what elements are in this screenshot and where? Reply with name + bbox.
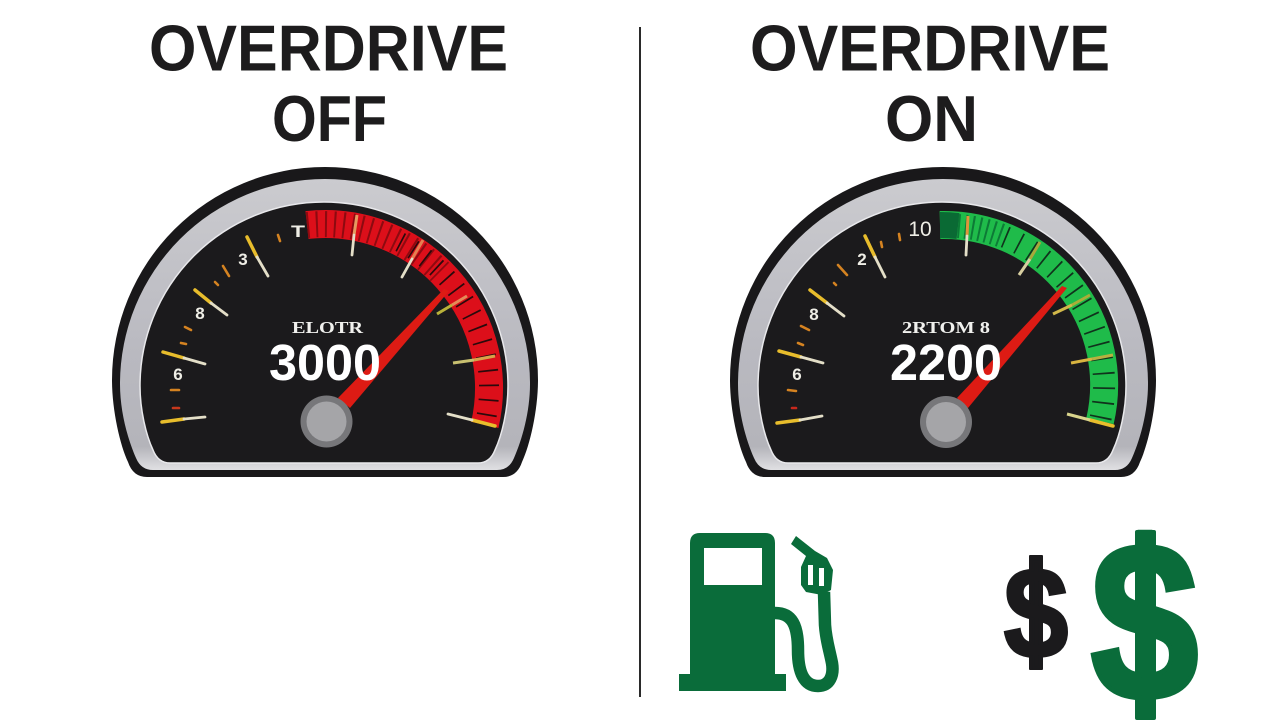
readout label: ELOTR <box>292 318 364 337</box>
dial numerals: 6 <box>173 365 183 384</box>
gauge: overdrive off, 3000 rpm <box>112 167 538 477</box>
nozzle <box>791 536 833 595</box>
hub <box>300 396 352 448</box>
dial numerals <box>792 218 932 384</box>
dial numerals: 10 <box>908 218 932 241</box>
dial numerals <box>173 222 306 384</box>
heading: overdrive on <box>750 12 1110 155</box>
red zone arc <box>307 224 489 425</box>
readout label: 2RTOM 8 <box>902 318 990 337</box>
divider line <box>639 27 641 697</box>
needle <box>957 286 1067 408</box>
heading: overdrive on: OVERDRIVE <box>750 12 1110 84</box>
scale ticks <box>777 216 1113 426</box>
dial numerals: 6 <box>792 365 802 384</box>
readout value: 2200 <box>890 334 1002 391</box>
heading: overdrive off: OVERDRIVE <box>149 12 508 84</box>
scale ticks <box>162 215 495 426</box>
icon: small black dollar sign: $ <box>1003 541 1069 686</box>
heading: overdrive off: OFF <box>272 82 387 155</box>
readout value: 3000 <box>269 334 381 391</box>
green zone arc <box>940 225 1104 421</box>
dial numerals: 8 <box>809 305 819 324</box>
dial numerals: 2 <box>857 250 867 269</box>
dial numerals: T <box>291 222 306 241</box>
dial numerals: 8 <box>195 304 205 323</box>
hose <box>775 592 832 686</box>
heading: overdrive on: ON <box>885 82 978 155</box>
needle <box>338 289 449 408</box>
gauge: overdrive on, 2200 rpm <box>730 167 1156 477</box>
hub <box>920 396 972 448</box>
icon: fuel pump <box>679 533 833 691</box>
dial numerals: 3 <box>238 250 248 269</box>
heading: overdrive off <box>149 12 508 155</box>
